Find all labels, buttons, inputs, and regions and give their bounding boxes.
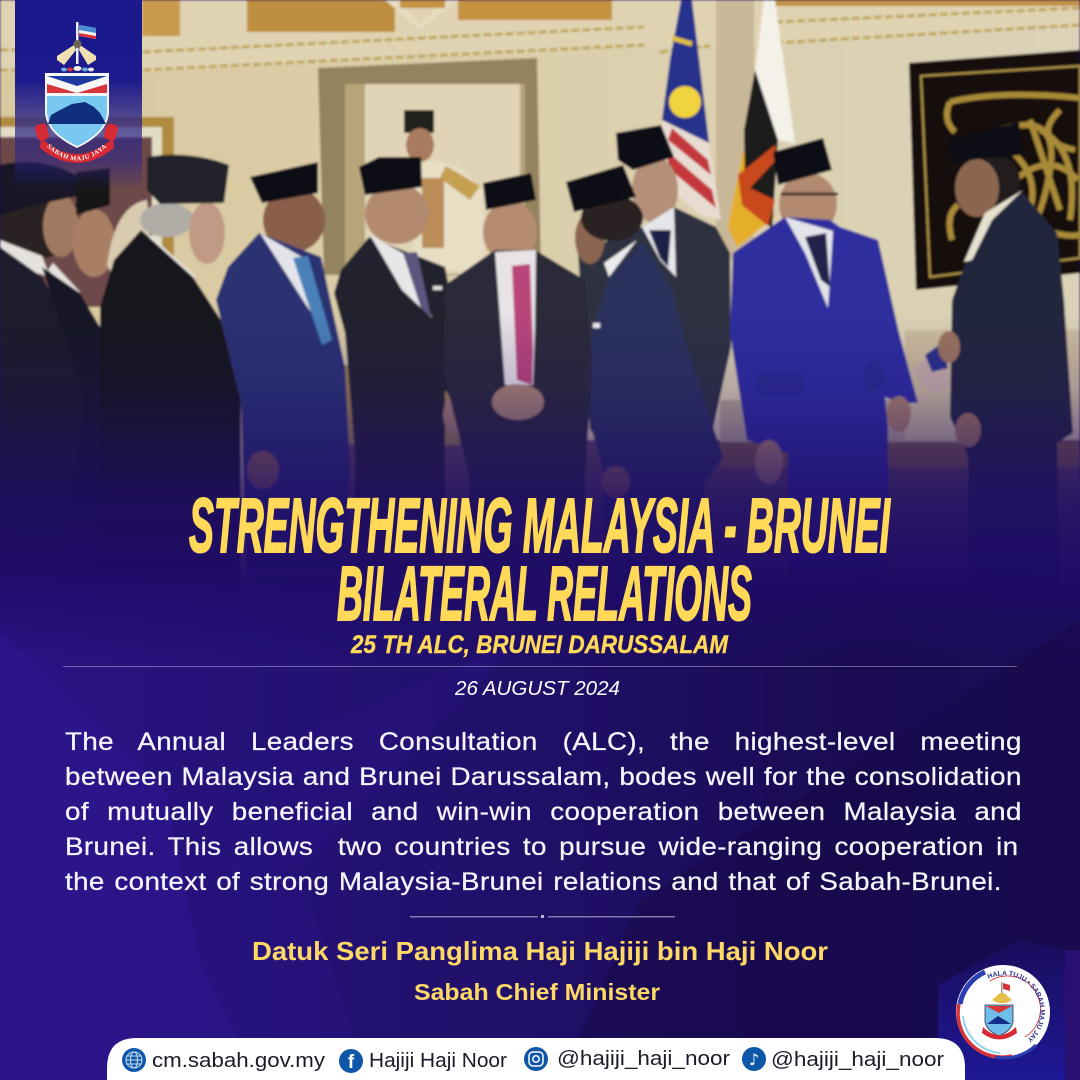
tiktok link: ♪ <box>749 1050 759 1069</box>
body paragraph <box>65 728 1022 896</box>
photo: leaders at the Annual Leaders Consultation <box>0 0 1080 640</box>
instagram link: @hajiji_haji_noor <box>557 1048 730 1070</box>
title <box>189 483 891 637</box>
round badge logo: HALA TUJU • SABAH MAJU JAYA <box>987 970 1045 1043</box>
top-left blue banner <box>15 0 142 190</box>
person 5 in black suit <box>334 157 476 640</box>
calligraphy frame on right wall <box>909 50 1080 290</box>
body paragraph: Brunei. This allows two countries to pursue wide-ranging cooperation in <box>65 833 1018 861</box>
signatory role: Sabah Chief Minister <box>414 979 660 1005</box>
body paragraph: the context of strong Malaysia-Brunei relations and that of Sabah-Brunei. <box>65 868 1002 896</box>
date: 26 AUGUST 2024 <box>454 677 620 700</box>
background gradient and geometric shards <box>0 560 1080 1080</box>
Sabah state crest <box>35 22 118 163</box>
person 9 in blue suit <box>730 138 918 640</box>
person 2 <box>42 168 127 640</box>
body paragraph: The Annual Leaders Consultation (ALC), the highest-level meeting <box>65 728 1022 756</box>
person 4 in navy suit <box>216 162 350 640</box>
subtitle: 25 TH ALC, BRUNEI DARUSSALAM <box>350 631 729 659</box>
floor and table <box>340 440 1080 640</box>
tiktok link <box>742 1047 944 1071</box>
person 1 left edge <box>0 162 100 640</box>
body paragraph: between Malaysia and Brunei Darussalam, bodes well for the consolidation <box>65 763 1022 791</box>
portrait frame on wall <box>318 58 541 275</box>
Brunei flag <box>728 0 795 247</box>
facebook link: f <box>348 1052 355 1073</box>
website link: cm.sabah.gov.my <box>152 1050 325 1072</box>
person 8 back <box>578 125 731 470</box>
tiktok link: @hajiji_haji_noor <box>771 1049 944 1071</box>
left wall frame <box>0 117 174 307</box>
Malaysian flag <box>660 0 721 220</box>
instagram link <box>524 1047 730 1071</box>
footer social bar <box>107 1038 965 1080</box>
Sabah state crest: SABAH MAJU JAYA <box>47 144 107 161</box>
person 6 centre with pink tie <box>443 173 592 640</box>
body paragraph: of mutually beneficial and win-win cooperation between Malaysia and <box>65 798 1022 826</box>
signatory name: Datuk Seri Panglima Haji Hajiji bin Haji Noor <box>252 936 828 966</box>
person 10 far right <box>938 122 1073 640</box>
person 3 <box>100 155 241 640</box>
person 7 from behind <box>566 165 723 640</box>
facebook link: Hajiji Haji Noor <box>369 1050 507 1072</box>
